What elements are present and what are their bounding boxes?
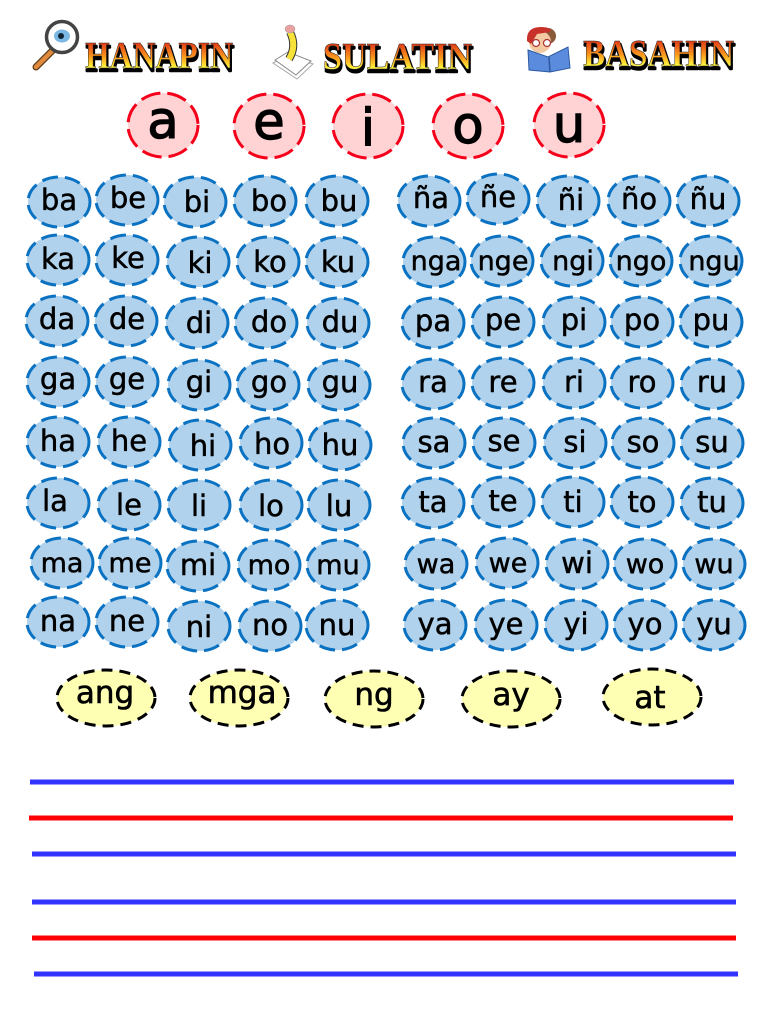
- syllable go: go: [251, 365, 287, 399]
- vowel i: i: [361, 99, 375, 158]
- vowels row: [128, 92, 604, 158]
- vowel e: [234, 93, 304, 158]
- syllable ki: [167, 237, 229, 287]
- syllable ro: ro: [627, 365, 657, 399]
- syllable mo: mo: [248, 550, 290, 581]
- syllable sa: sa: [418, 425, 450, 459]
- syllable yi: [545, 600, 607, 650]
- syllable ma: ma: [41, 548, 83, 579]
- syllable ho: ho: [254, 427, 290, 461]
- heading: SULATIN: SULATIN: [323, 36, 472, 78]
- syllable ñu: [677, 176, 739, 226]
- syllable pi: pi: [561, 303, 587, 337]
- syllable we: [476, 538, 538, 588]
- syllable lu: [308, 480, 370, 530]
- syllable ga: [27, 357, 89, 407]
- syllable wo: wo: [626, 549, 664, 580]
- syllable de: [95, 296, 157, 346]
- header: [36, 22, 735, 81]
- syllable ma: [31, 538, 93, 588]
- syllable lu: lu: [326, 489, 352, 523]
- syllable wo: [614, 539, 676, 589]
- syllable wu: [683, 539, 745, 589]
- syllable wi: wi: [561, 546, 593, 580]
- syllable pa: [402, 298, 464, 348]
- syllable ga: ga: [40, 362, 76, 396]
- syllable to: to: [627, 485, 657, 519]
- syllable mu: [307, 540, 369, 590]
- syllable ye: [475, 600, 537, 650]
- syllable ñi: [537, 176, 599, 226]
- syllable te: te: [488, 484, 518, 518]
- syllable gi: [168, 360, 230, 410]
- syllable wa: [405, 539, 467, 589]
- syllable si: si: [563, 425, 587, 459]
- syllable hu: [309, 420, 371, 470]
- syllable me: [99, 538, 161, 588]
- syllable ño: [608, 176, 670, 226]
- vowel i: [333, 94, 403, 158]
- syllable hi: hi: [190, 429, 216, 463]
- syllable go: [237, 360, 299, 410]
- syllable lo: lo: [258, 489, 284, 523]
- syllable wa: wa: [417, 549, 455, 580]
- word mga: [190, 670, 288, 726]
- syllable nga: [403, 237, 465, 287]
- syllable ri: [543, 358, 605, 408]
- vowel u: [534, 93, 604, 157]
- syllable ru: [681, 359, 743, 409]
- syllable pu: [680, 297, 742, 347]
- syllable wu: wu: [694, 549, 734, 580]
- syllable ku: [306, 237, 368, 287]
- syllable ta: [402, 478, 464, 528]
- heading: HANAPIN: HANAPIN: [86, 38, 234, 80]
- syllable ngu: [680, 236, 742, 286]
- syllable ge: ge: [109, 362, 145, 396]
- syllable ha: [27, 417, 89, 467]
- vowel o: o: [452, 97, 484, 156]
- syllable to: [611, 477, 673, 527]
- syllable bu: [306, 176, 368, 226]
- syllable gu: gu: [322, 365, 358, 399]
- syllable ni: ni: [186, 610, 212, 644]
- heading: BASAHIN: BASAHIN: [583, 33, 734, 75]
- syllable ña: ña: [413, 181, 449, 215]
- syllable bo: bo: [251, 184, 287, 218]
- syllable he: he: [111, 424, 147, 458]
- syllable ra: ra: [418, 365, 448, 399]
- syllable pa: pa: [415, 304, 451, 338]
- syllable bu: bu: [321, 184, 357, 218]
- syllable mi: mi: [180, 548, 216, 582]
- syllable wi: [546, 539, 608, 589]
- syllable se: [473, 418, 535, 468]
- syllable do: [235, 298, 297, 348]
- syllable di: [166, 298, 228, 348]
- syllable su: su: [695, 425, 729, 459]
- icon: child reading book: [527, 27, 570, 72]
- syllable yo: [614, 600, 676, 650]
- syllable ngo: ngo: [616, 246, 666, 277]
- syllable yo: yo: [628, 607, 662, 641]
- syllable pe: [472, 297, 534, 347]
- syllable la: [27, 478, 89, 528]
- syllable ñe: [467, 174, 529, 224]
- word mga: mga: [208, 675, 276, 711]
- heading: SULATIN: SULATIN: [324, 39, 473, 81]
- syllable be: [96, 175, 158, 225]
- syllable mo: [238, 540, 300, 590]
- syllable pe: pe: [485, 303, 521, 337]
- syllable da: [26, 296, 88, 346]
- syllable se: se: [488, 424, 520, 458]
- syllable ri: ri: [564, 365, 584, 399]
- syllable re: [472, 358, 534, 408]
- vowel e: e: [253, 93, 285, 152]
- syllable nge: [471, 236, 533, 286]
- vowel o: [433, 94, 503, 158]
- syllable du: [307, 298, 369, 348]
- syllable po: [611, 297, 673, 347]
- syllable ho: [240, 418, 302, 468]
- vowel u: u: [553, 96, 585, 155]
- syllable ke: ke: [111, 241, 145, 275]
- syllable ngi: [541, 236, 603, 286]
- syllable ña: [398, 176, 460, 226]
- panel: common words: [57, 669, 701, 727]
- syllable pu: pu: [693, 303, 729, 337]
- word at: [603, 669, 701, 725]
- syllable li: [168, 480, 230, 530]
- syllable we: we: [489, 548, 527, 579]
- syllable de: de: [109, 302, 145, 336]
- syllable du: du: [322, 305, 358, 339]
- syllable da: da: [39, 302, 75, 336]
- syllable ko: [237, 237, 299, 287]
- syllable ko: ko: [253, 245, 287, 279]
- icon: magnifying glass: [36, 22, 78, 67]
- syllable ba: ba: [41, 183, 77, 217]
- syllable hi: [169, 420, 231, 470]
- syllable nu: [306, 600, 368, 650]
- syllable ngi: ngi: [552, 246, 594, 277]
- syllable tu: tu: [697, 485, 727, 519]
- syllable li: li: [191, 489, 207, 523]
- word ay: [462, 671, 560, 727]
- syllable po: po: [624, 303, 660, 337]
- syllable yu: yu: [696, 607, 732, 641]
- syllable re: re: [488, 365, 518, 399]
- syllable bi: bi: [184, 185, 210, 219]
- syllable so: so: [627, 425, 659, 459]
- heading: HANAPIN: HANAPIN: [85, 35, 233, 77]
- syllable so: [612, 418, 674, 468]
- syllable pi: [543, 297, 605, 347]
- syllable ka: [27, 235, 89, 285]
- vowel a: [128, 92, 198, 157]
- syllable ya: ya: [418, 607, 452, 641]
- syllable si: [544, 418, 606, 468]
- syllable ki: ki: [188, 246, 212, 280]
- syllable sa: [403, 418, 465, 468]
- syllable ra: [402, 359, 464, 409]
- vowel a: a: [147, 92, 179, 151]
- syllable no: [239, 601, 301, 651]
- syllable ñu: ñu: [690, 182, 726, 216]
- syllable mi: [167, 541, 229, 591]
- syllable bi: [164, 177, 226, 227]
- word at: at: [634, 680, 666, 716]
- syllable di: di: [186, 306, 212, 340]
- syllable mu: mu: [316, 550, 360, 581]
- panel: left syllable grid: [26, 175, 371, 651]
- syllable su: [681, 418, 743, 468]
- syllable ye: ye: [488, 607, 524, 641]
- syllable le: [98, 480, 160, 530]
- syllable tu: [681, 478, 743, 528]
- syllable ro: [611, 358, 673, 408]
- syllable yi: yi: [563, 607, 589, 641]
- syllable ta: ta: [418, 485, 448, 519]
- syllable na: [27, 597, 89, 647]
- syllable ke: [96, 235, 158, 285]
- syllable ti: [542, 477, 604, 527]
- word ng: [325, 671, 423, 727]
- handwriting practice lines: [29, 782, 738, 974]
- syllable ni: [168, 601, 230, 651]
- syllable hu: hu: [322, 428, 358, 462]
- syllable ñi: ñi: [558, 183, 584, 217]
- syllable ya: [404, 600, 466, 650]
- word ang: ang: [76, 675, 134, 711]
- syllable la: la: [42, 484, 68, 518]
- syllable ne: ne: [109, 604, 145, 638]
- icon: pencil and paper: [273, 25, 313, 79]
- syllable he: [98, 417, 160, 467]
- panel: right syllable grid: [398, 174, 745, 650]
- syllable ñe: ñe: [480, 180, 516, 214]
- syllable gu: [308, 360, 370, 410]
- syllable ka: ka: [41, 242, 75, 276]
- syllable ba: [28, 177, 90, 227]
- syllable me: me: [109, 548, 151, 579]
- syllable ngu: ngu: [688, 246, 740, 277]
- syllable nge: nge: [478, 246, 528, 277]
- syllable ne: [96, 597, 158, 647]
- syllable ha: ha: [40, 424, 76, 458]
- syllable yu: [683, 600, 745, 650]
- syllable ge: [96, 357, 158, 407]
- syllable be: be: [110, 181, 146, 215]
- syllable te: [472, 477, 534, 527]
- syllable ngo: [610, 236, 672, 286]
- syllable ru: ru: [697, 365, 727, 399]
- syllable ño: ño: [621, 182, 657, 216]
- syllable ku: ku: [321, 245, 355, 279]
- syllable nga: nga: [411, 246, 461, 277]
- word ng: ng: [354, 677, 394, 713]
- syllable lo: [240, 480, 302, 530]
- word ay: ay: [492, 677, 530, 713]
- syllable do: do: [251, 305, 287, 339]
- syllable gi: gi: [186, 365, 212, 399]
- syllable na: na: [40, 604, 76, 638]
- syllable nu: nu: [319, 608, 355, 642]
- syllable le: le: [116, 488, 142, 522]
- heading: BASAHIN: BASAHIN: [584, 36, 735, 78]
- syllable bo: [234, 176, 296, 226]
- syllable no: no: [252, 608, 288, 642]
- syllable ti: ti: [563, 485, 583, 519]
- word ang: [57, 670, 155, 726]
